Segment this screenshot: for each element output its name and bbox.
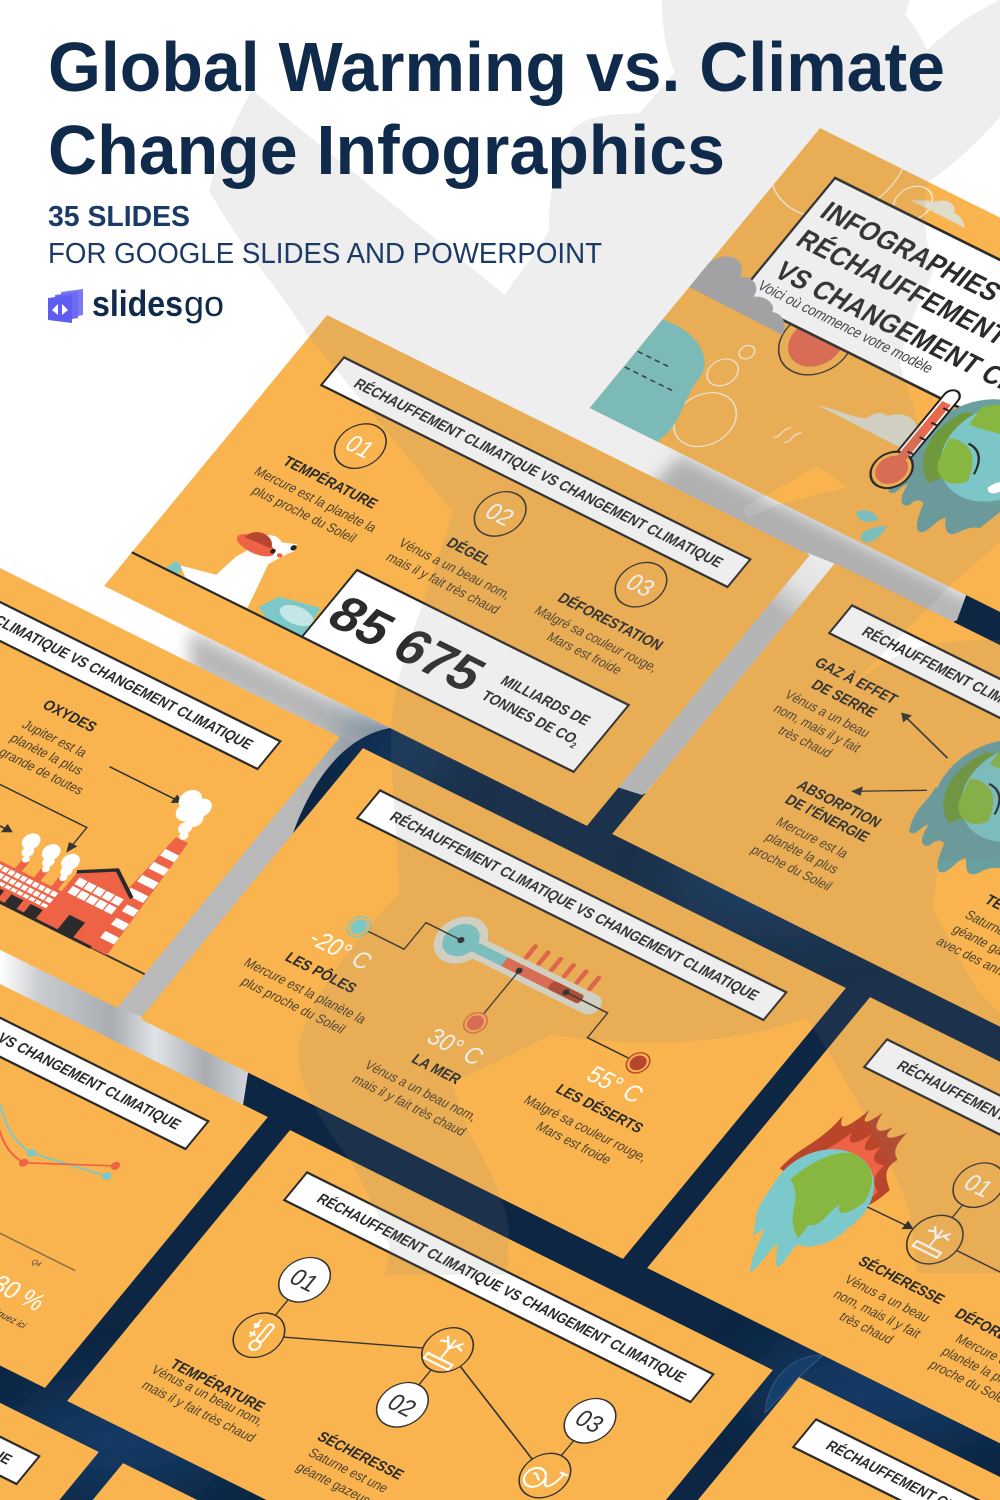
slide: chain diagram: mais il y fait très chaud bbox=[139, 1378, 259, 1445]
slide: thermometer: plus proche du Soleil bbox=[238, 974, 349, 1036]
slide: greenhouse gases: DE SERRE bbox=[807, 677, 880, 721]
red sun bbox=[778, 324, 848, 376]
slide: temperature / dégel / déforestation: 02 bbox=[479, 498, 520, 532]
slide: chain diagram: 03 bbox=[569, 1405, 609, 1438]
icon: melting earth bbox=[909, 740, 1000, 874]
grey cloud bbox=[690, 256, 785, 335]
slide: bottom left partial bbox=[0, 1402, 99, 1500]
slide: temperature / dégel / déforestation: Vénus a un beau nom, bbox=[395, 535, 515, 602]
grey gap between slides, right bbox=[615, 553, 838, 797]
slide: greenhouse gases: très chaud bbox=[775, 723, 836, 760]
stat box: 85 675 bbox=[317, 585, 497, 702]
slide: temperature / dégel / déforestation: RÉCHAUFFEMENT CLIMATIQUE VS CHANGEMENT CLIMATIQUE bbox=[350, 376, 727, 571]
slide: thermometer: LES PÔLES bbox=[281, 948, 361, 997]
slide: thermometer: 55° C bbox=[581, 1061, 649, 1109]
slide: factory: OXYDES bbox=[39, 698, 100, 736]
slide: burning earth: 01 bbox=[958, 1170, 998, 1203]
slide: temperature / dégel / déforestation bbox=[104, 315, 810, 826]
slide: bottom right partial bbox=[698, 1377, 1000, 1500]
logo: slidesgo: go bbox=[184, 283, 224, 324]
slide: burning earth: très chaud bbox=[836, 1309, 897, 1347]
slide: greenhouse gases: proche du Soleil bbox=[748, 842, 836, 894]
slide: thermometer: Mars est froide bbox=[533, 1119, 615, 1167]
slide: chain diagram bbox=[67, 1130, 773, 1500]
slide: temperature / dégel / déforestation: Mercure est la planète la bbox=[251, 464, 381, 535]
teal shape bbox=[590, 320, 705, 442]
slide: title slide bbox=[590, 128, 1000, 612]
slide: thermometer: Malgré sa couleur rouge, bbox=[521, 1092, 651, 1164]
slide: burning earth: Vénus a un beau bbox=[841, 1272, 934, 1325]
stat box: MILLIARDS DE bbox=[497, 673, 594, 729]
slide: chain diagram: TEMPÉRATURE bbox=[166, 1356, 269, 1415]
icon: burning earth bbox=[750, 1110, 908, 1272]
slide: greenhouse gases: nom, mais il y fait bbox=[770, 701, 865, 755]
stat box: TONNES DE CO bbox=[477, 688, 580, 747]
slide: chain diagram: 02 bbox=[381, 1389, 422, 1422]
grey gap shadow under temperature slide bbox=[190, 630, 410, 750]
slide: burning earth: SÉCHERESSE bbox=[854, 1253, 948, 1308]
title bbox=[48, 28, 945, 189]
decorative circles bbox=[673, 168, 934, 448]
subtitle: slide count: 35 SLIDES bbox=[48, 201, 190, 233]
slide: greenhouse gases: GAZ À EFFET bbox=[811, 654, 901, 708]
grey gap shadow under title slide bbox=[640, 455, 1000, 690]
slide: greenhouse gases: Mercure est la bbox=[773, 814, 852, 861]
slide: thermometer: -20° C bbox=[303, 925, 378, 976]
slide: line chart: Q4 bbox=[29, 1257, 44, 1269]
slide: chain diagram: 01 bbox=[283, 1264, 324, 1297]
navy background bbox=[0, 593, 1000, 1500]
icon: melting earth bbox=[888, 399, 1000, 534]
grey gap between slides, left bbox=[113, 735, 366, 1020]
slide: temperature / dégel / déforestation: DÉGEL bbox=[442, 534, 496, 569]
slide: burning earth: nom, mais il y fait bbox=[830, 1287, 925, 1341]
beige cloud bbox=[818, 405, 917, 448]
slide: temperature / dégel / déforestation: TEMPÉRATURE bbox=[279, 453, 382, 512]
slide: thermometer: LA MER bbox=[408, 1052, 465, 1088]
slide: burning earth bbox=[647, 997, 1000, 1444]
slide: chain diagram: SÉCHERESSE bbox=[313, 1428, 408, 1483]
slide: temperature / dégel / déforestation: 01 bbox=[339, 430, 380, 464]
teal drops bbox=[856, 510, 887, 542]
slide: chain diagram: Saturne est une bbox=[305, 1445, 392, 1496]
logo: slidesgo: slides bbox=[92, 283, 183, 324]
stat box: 2 bbox=[568, 740, 579, 750]
logo: slidesgo bbox=[48, 283, 224, 324]
slide: greenhouse gases: DE l'ÉNERGIE bbox=[781, 792, 873, 846]
title box: Voici où commence votre modèle bbox=[754, 278, 937, 377]
title: Change Infographics bbox=[48, 111, 725, 189]
slide: thermometer: Mercure est la planète la bbox=[241, 955, 370, 1027]
navy highlights bbox=[10, 720, 1000, 1490]
thermometer bbox=[434, 916, 602, 1014]
illustration: polar bear on ice bbox=[166, 532, 321, 636]
slide: greenhouse gases: Vénus a un beau bbox=[781, 687, 874, 740]
small beige cloud bbox=[910, 200, 965, 228]
grey gap between left slides bbox=[0, 948, 250, 1108]
title: Global Warming vs. Climate bbox=[48, 28, 945, 106]
slide: thermometer: mais il y fait très chaud bbox=[349, 1072, 470, 1139]
slide: thermometer bbox=[140, 748, 846, 1259]
slide: temperature / dégel / déforestation: mais il y fait très chaud bbox=[383, 549, 504, 617]
slide: thermometer: 30° C bbox=[421, 1024, 489, 1071]
slide: thermometer: Vénus a un beau nom, bbox=[361, 1057, 481, 1124]
slide: factory: planète la plus bbox=[7, 731, 87, 778]
light grey background silhouette bbox=[209, 0, 1000, 1275]
icon: thermometer bbox=[869, 389, 961, 490]
slide: greenhouse gases: planète la plus bbox=[762, 829, 843, 877]
slide: line chart bbox=[0, 984, 268, 1388]
slide: chain diagram: Vénus a un beau nom, bbox=[148, 1362, 268, 1429]
title box bbox=[750, 176, 1000, 408]
slide: temperature / dégel / déforestation: 03 bbox=[620, 569, 660, 602]
slide: temperature / dégel / déforestation: DÉFORESTATION bbox=[554, 590, 667, 654]
slide: temperature / dégel / déforestation: plus proche du Soleil bbox=[249, 483, 360, 545]
slide: greenhouse gases bbox=[612, 563, 1000, 1074]
stat box bbox=[302, 570, 629, 772]
slide: greenhouse gases: ABSORPTION bbox=[793, 778, 884, 831]
slide: bottom centre partial bbox=[92, 1463, 198, 1500]
slide: thermometer: LES DÉSERTS bbox=[552, 1081, 647, 1137]
subtitle: formats: FOR GOOGLE SLIDES AND POWERPOINT bbox=[48, 238, 602, 270]
slide: thermometer: RÉCHAUFFEMENT CLIMATIQUE VS CHANGEMENT CLIMATIQUE bbox=[386, 809, 763, 1004]
navy corner arc bbox=[765, 1355, 823, 1413]
slide: temperature / dégel / déforestation: Mars est froide bbox=[544, 629, 626, 677]
slide: chain diagram: RÉCHAUFFEMENT CLIMATIQUE VS CHANGEMENT CLIMATIQUE bbox=[313, 1191, 690, 1386]
slide: factory bbox=[0, 568, 340, 1008]
slide: temperature / dégel / déforestation: Malgré sa couleur rouge, bbox=[531, 603, 662, 675]
slide: factory: Jupiter est la bbox=[19, 717, 91, 760]
